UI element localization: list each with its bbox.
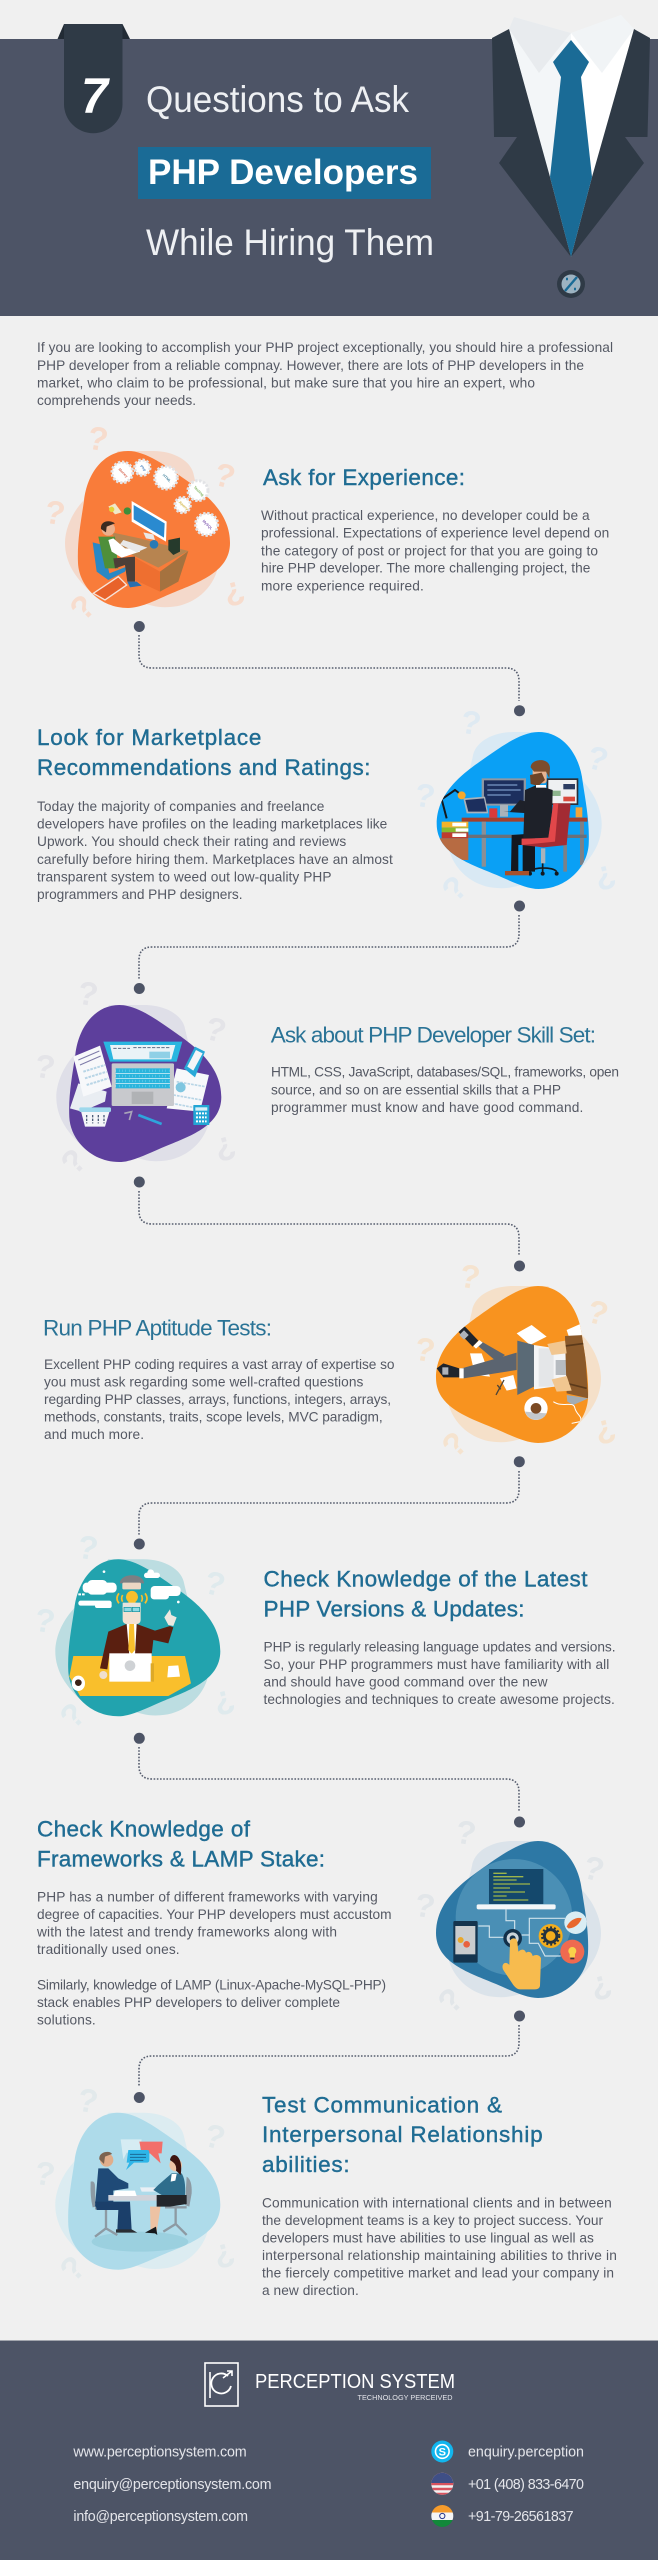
illustration: touch interface and tech icons: ?	[412, 1886, 438, 1925]
illustration: touch interface and tech icons: ?	[430, 1980, 471, 2021]
body text: methods, constants, traits, scope levels, MVC paradigm,	[44, 1410, 383, 1425]
heading	[37, 1816, 325, 1872]
illustration: top-down coder with laptop: ?	[412, 1330, 438, 1369]
illustration: man with lightbulb at desk: ?	[32, 1601, 58, 1640]
body text: developers have profiles on the leading marketplaces like	[37, 817, 387, 832]
illustration: developer with monitors: ?	[412, 776, 438, 815]
illustration: two people talking at table: ?	[200, 2116, 229, 2157]
illustration: developer at desk with gears: Testing	[193, 485, 205, 497]
header banner	[0, 15, 658, 316]
contact links: www.perceptionsystem.com	[72, 2445, 247, 2461]
body text: and should have good command over the new	[264, 1675, 548, 1690]
illustration: developer at desk with gears: ?	[210, 455, 239, 496]
illustration: man with lightbulb at desk: ?	[200, 1563, 229, 1604]
icon: India flag	[431, 2505, 454, 2527]
panel: ask for experience	[42, 419, 609, 628]
heading: Ask about PHP Developer Skill Set:	[271, 1023, 596, 1048]
illustration: man with lightbulb at desk: ?	[52, 1695, 93, 1736]
illustration: top-down coder with laptop: ?	[583, 1292, 612, 1333]
illustration: developer at desk with gears: ?	[62, 587, 103, 628]
panel: aptitude tests	[43, 1257, 619, 1465]
icon: skype: S	[439, 2446, 446, 2458]
body text: transparent system to weed out low-quality PHP	[37, 869, 332, 884]
illustration: developer at desk with gears: ?	[42, 493, 68, 532]
heading: PHP Versions & Updates:	[264, 1597, 524, 1622]
heading: Look for Marketplace	[37, 725, 261, 750]
heading: Run PHP Aptitude Tests:	[43, 1315, 272, 1340]
contact details: enquiry.perception	[468, 2445, 584, 2461]
body text: solutions.	[37, 2012, 96, 2028]
body text	[44, 1357, 395, 1442]
illustration: laptop and documents	[32, 974, 239, 1182]
body text: degree of capacities. Your PHP developers must accustom	[37, 1907, 392, 1922]
title highlight	[138, 147, 431, 199]
intro text: PHP developer from a reliable compnay. However, there are lots of PHP developers in the	[37, 358, 584, 373]
illustration: touch interface and tech icons: ?	[579, 1848, 608, 1889]
heading	[264, 1567, 588, 1622]
body text: So, your PHP programmers must have familiarity with all	[264, 1657, 609, 1672]
body text: developers must have abilities to use lingual as well as	[262, 2230, 594, 2246]
heading: Recommendations and Ratings:	[37, 755, 370, 780]
heading: abilities:	[262, 2152, 350, 2177]
intro text: comprehends your needs.	[37, 393, 196, 408]
illustration: developer at desk with gears: Money	[118, 467, 129, 479]
heading: Check Knowledge of	[37, 1816, 251, 1841]
number ribbon: 7	[81, 68, 110, 124]
body text	[264, 1640, 616, 1707]
body text: Today the majority of companies and freelance	[37, 799, 324, 814]
heading	[262, 2092, 543, 2177]
panel: latest PHP versions	[32, 1528, 616, 1736]
body text: programmers and PHP designers.	[37, 887, 242, 902]
heading: Frameworks & LAMP Stake:	[37, 1847, 325, 1872]
icon: US flag	[431, 2472, 454, 2496]
panel: developer skill set	[32, 974, 619, 1182]
body text	[37, 799, 393, 902]
illustration: two people talking at table	[32, 2081, 238, 2289]
body text: carefully before hiring them. Marketplaces have an almost	[37, 852, 393, 867]
connector 5	[134, 1733, 525, 1828]
body text: stack enables PHP developers to deliver complete	[37, 1995, 340, 2010]
illustration: laptop and documents: ?	[75, 974, 101, 1013]
body text: with the latest and trendy frameworks along with	[36, 1925, 337, 1940]
illustration: top-down coder with laptop	[417, 1265, 615, 1454]
illustration: developer with monitors	[418, 711, 615, 898]
body text: Excellent PHP coding requires a vast array of expertise so	[44, 1357, 395, 1372]
body text: the development teams is a key to project success. Your	[262, 2213, 603, 2228]
illustration: developer with monitors: ?	[583, 738, 612, 779]
illustration: man with lightbulb at desk: ¿	[209, 1677, 238, 1718]
illustration: touch interface and tech icons: ¿	[586, 1962, 615, 2003]
illustration: two people talking at table: ?	[75, 2081, 101, 2120]
connector 4	[134, 1456, 525, 1550]
contact details: +01 (408) 833-6470	[468, 2477, 584, 2493]
body text	[262, 2195, 617, 2298]
body text: interpersonal relationship maintaining abilities to thrive in	[262, 2248, 617, 2263]
title line three: While Hiring Them	[146, 222, 434, 263]
heading: Interpersonal Relationship	[262, 2122, 543, 2147]
body text: Without practical experience, no developer could be a	[261, 508, 590, 523]
illustration: top-down coder with laptop: ?	[434, 1424, 475, 1465]
contact details	[468, 2445, 584, 2525]
logo	[205, 2363, 455, 2406]
connector 1	[134, 621, 525, 716]
contact links: info@perceptionsystem.com	[73, 2509, 248, 2525]
body text: Similarly, knowledge of LAMP (Linux-Apache-MySQL-PHP)	[37, 1977, 386, 1992]
contact details: +91-79-26561837	[468, 2509, 574, 2525]
connector 2	[134, 900, 525, 994]
body text: hire PHP developer. The more challenging project, the	[261, 561, 590, 576]
connector 6	[134, 2010, 525, 2103]
body text: source, and so on are essential skills that a PHP	[271, 1082, 561, 1097]
illustration: laptop and documents: ?	[32, 1047, 58, 1086]
body text: PHP has a number of different frameworks with varying	[37, 1890, 378, 1904]
illustration: top-down coder with laptop: ¿	[590, 1406, 619, 1447]
body text: you must ask regarding some well-crafted questions	[44, 1375, 364, 1390]
body text: Communication with international clients and in between	[262, 2195, 612, 2210]
body text: regarding PHP classes, arrays, functions, integers, arrays,	[44, 1392, 391, 1407]
illustration: two people talking at table: ¿	[209, 2230, 238, 2271]
body text: HTML, CSS, JavaScript, databases/SQL, frameworks, open	[271, 1065, 619, 1080]
heading: Ask for Experience:	[263, 465, 465, 490]
heading: Test Communication &	[262, 2092, 502, 2117]
body text	[271, 1065, 619, 1115]
body text: programmer must know and have good command.	[271, 1100, 583, 1115]
panel: communication abilities	[32, 2081, 617, 2298]
illustration: two people talking at table: ?	[32, 2154, 58, 2193]
intro text: If you are looking to accomplish your PHP project exceptionally, you should hire a professional	[37, 340, 613, 355]
contact links	[72, 2445, 272, 2525]
body text	[36, 1890, 392, 2028]
number ribbon	[58, 24, 130, 133]
title line one: Questions to Ask	[146, 79, 409, 120]
connector 3	[134, 1176, 525, 1272]
illustration: touch interface and tech icons	[418, 1821, 611, 2010]
illustration: top-down coder with laptop: ?	[457, 1257, 483, 1296]
intro text	[37, 340, 613, 408]
illustration: developer at desk with gears	[42, 419, 248, 628]
body text: technologies and techniques to create awesome projects.	[264, 1692, 615, 1707]
illustration: laptop and documents: ?	[201, 1009, 230, 1050]
illustration: two people talking at table: ?	[52, 2248, 93, 2289]
heading: Check Knowledge of the Latest	[264, 1567, 588, 1592]
logo: PERCEPTION SYSTEM	[255, 2371, 455, 2393]
panel: frameworks and LAMP	[36, 1813, 615, 2028]
illustration: developer with monitors: ?	[458, 703, 484, 742]
title highlight: PHP Developers	[148, 153, 418, 192]
illustration: developer with monitors: ?	[434, 868, 475, 909]
illustration: developer at desk with gears: Jquery	[178, 500, 190, 512]
illustration: developer with monitors: ¿	[590, 852, 619, 893]
body text: the category of post or project for that you are going to	[261, 543, 598, 558]
illustration: developer at desk with gears: ¿	[219, 568, 248, 609]
illustration: developer at desk with gears: ?	[85, 419, 111, 458]
body text	[261, 508, 609, 593]
body text: a new direction.	[262, 2283, 359, 2298]
illustration: developer at desk with gears: Php	[139, 464, 147, 473]
icon: skype	[431, 2440, 453, 2462]
illustration: touch interface and tech icons: ?	[453, 1813, 479, 1852]
body text: Upwork. You should check their rating and reviews	[37, 834, 346, 849]
intro text: market, who claim to be professional, but make sure that you hire an expert, who	[37, 376, 535, 390]
illustration: man with lightbulb at desk: ?	[75, 1528, 101, 1567]
body text: traditionally used ones.	[37, 1942, 180, 1957]
illustration: laptop and documents: ?	[53, 1141, 94, 1182]
illustration: man with lightbulb at desk	[32, 1528, 238, 1736]
illustration: developer at desk with gears: MySQL	[201, 519, 214, 531]
heading	[37, 725, 370, 780]
illustration: developer at desk with gears: HTML	[162, 473, 172, 484]
contact links: enquiry@perceptionsystem.com	[73, 2477, 272, 2493]
body text: PHP is regularly releasing language updates and versions.	[264, 1640, 616, 1654]
body text: more experience required.	[261, 578, 424, 593]
body text: and much more.	[44, 1427, 144, 1442]
panel: marketplace recommendations	[37, 703, 619, 909]
footer	[0, 2340, 658, 2560]
body text: the fiercely competitive market and lead your company in	[262, 2266, 614, 2281]
illustration: laptop and documents: ¿	[210, 1123, 239, 1164]
body text: professional. Expectations of experience level depend on	[261, 526, 609, 541]
logo: TECHNOLOGY PERCEIVED	[358, 2393, 453, 2402]
icon: suit and tie	[492, 15, 650, 298]
